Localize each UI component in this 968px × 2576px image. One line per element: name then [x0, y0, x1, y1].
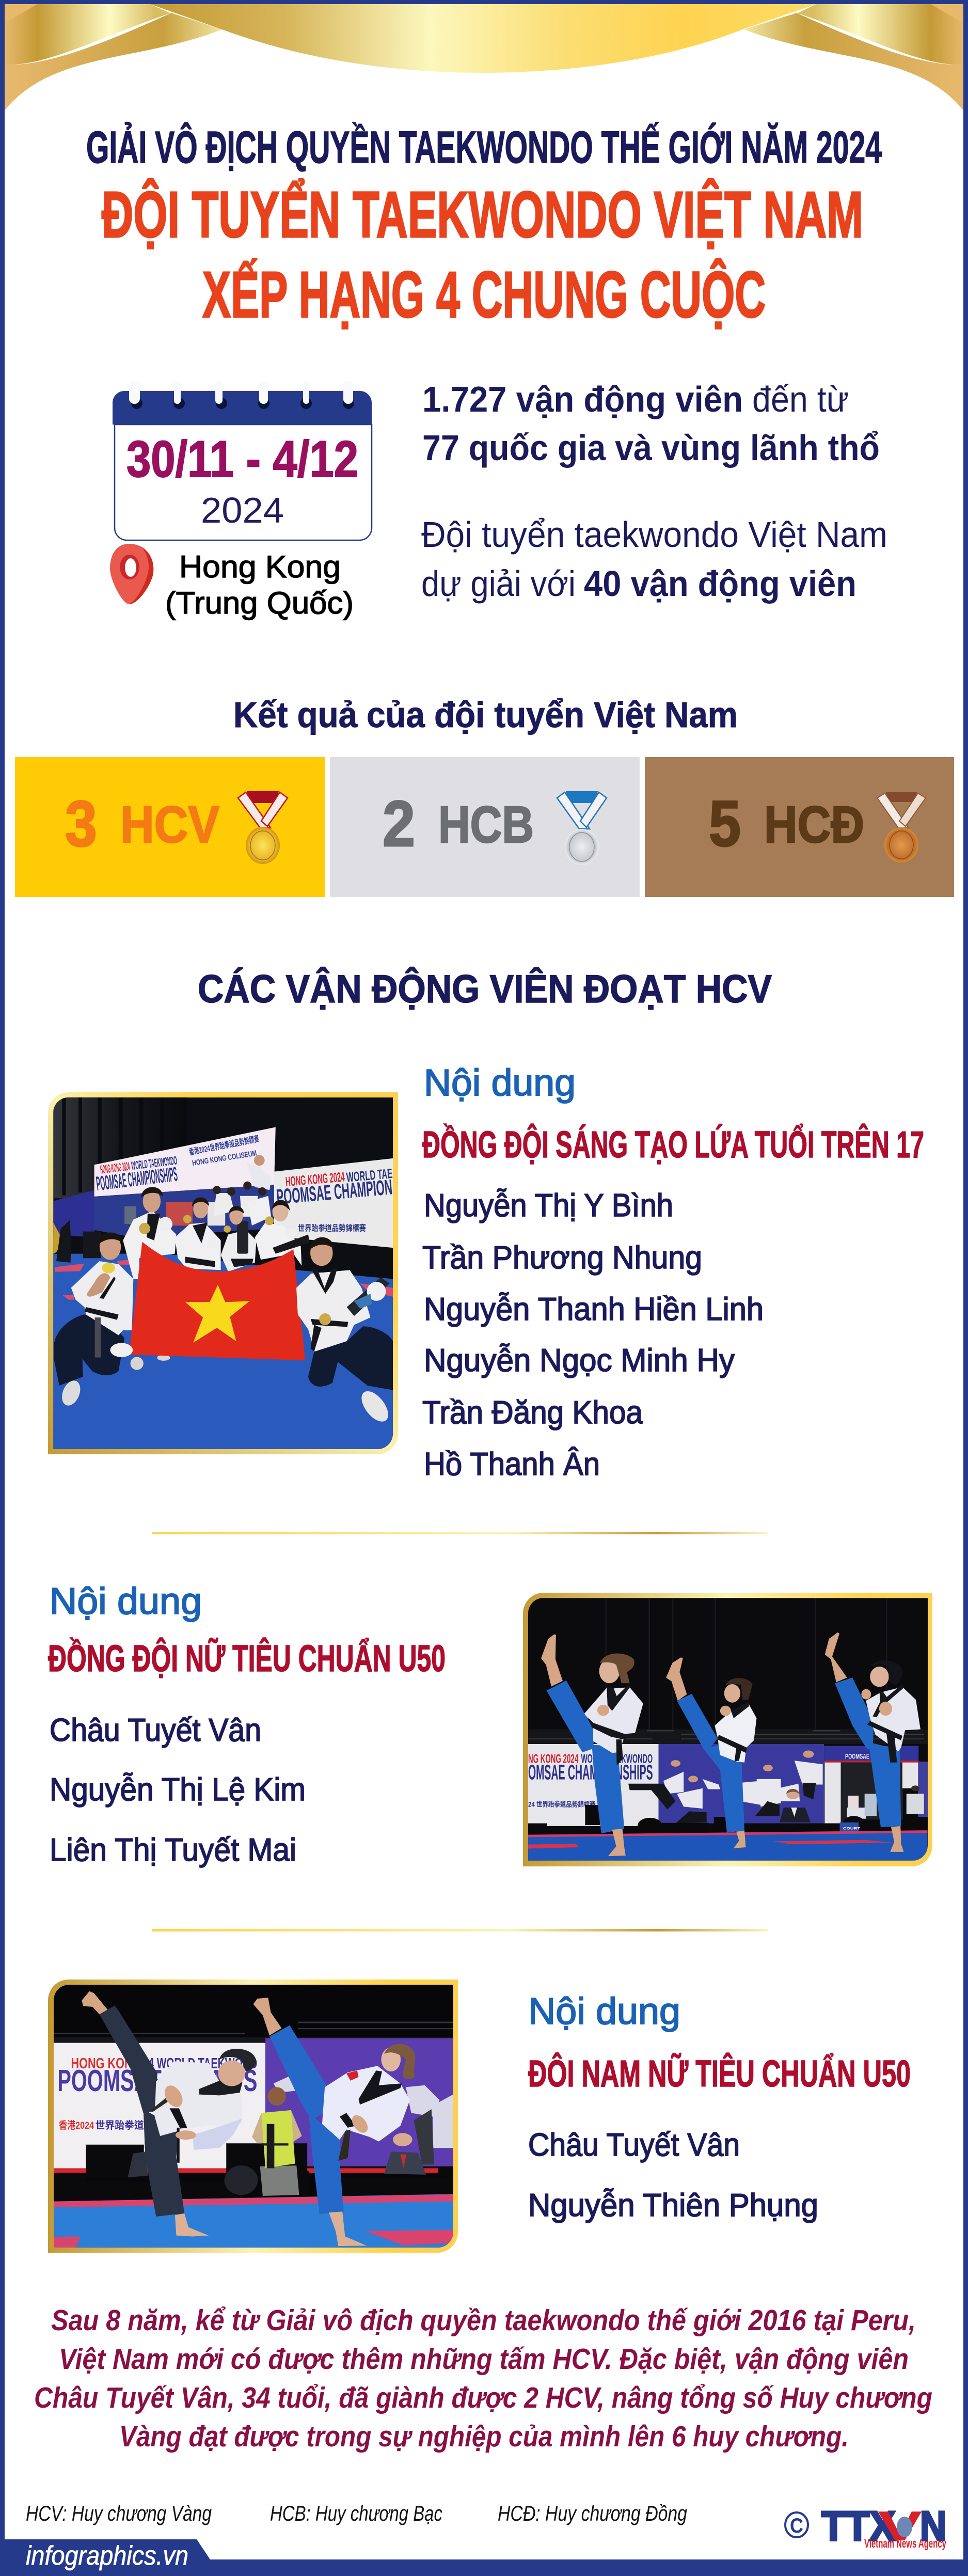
fact: athletes and countries [422, 379, 880, 468]
photo: male and female pair kicking: 香港2024 [59, 2119, 94, 2131]
shoes behind flag [131, 1357, 144, 1370]
legend [26, 2501, 687, 2525]
icon: location pin [110, 544, 153, 604]
fact: vietnam team size: Đội tuyển taekwondo Việt Nam [421, 514, 887, 555]
photo: team with flag: HONG KONG COLISEUM [192, 1149, 257, 1168]
photo: three athletes kicking: POOMSAE [845, 1752, 869, 1761]
calendar date: 30/11 - 4/12 [126, 430, 358, 488]
fact: athletes and countries: 1.727 vận động viên [422, 379, 743, 419]
photo: three athletes kicking: NG KONG 2024 [528, 1752, 578, 1766]
referee [780, 1808, 811, 1823]
section 3: athlete names: Nguyễn Thiên Phụng [528, 2188, 818, 2223]
logo: TTXVN: C [790, 2515, 803, 2537]
panel: gold medals: HCV [120, 796, 219, 854]
fact: vietnam team size: dự giải với [421, 563, 576, 604]
photo: three athletes kicking [523, 1593, 932, 1866]
section 2: category: ĐỒNG ĐỘI NỮ TIÊU CHUẨN U50 [48, 1638, 446, 1679]
panel: gold medals: 3 [65, 788, 97, 860]
photo: team with flag: POOMSAE CHAMPION [275, 1175, 393, 1209]
location text [165, 549, 354, 620]
heading: gold medal athletes: CÁC VẬN ĐỘNG VIÊN ĐOẠT HCV [198, 967, 772, 1011]
athlete left [541, 1635, 643, 1856]
banner athletes [663, 1761, 823, 1809]
athlete right [825, 1632, 921, 1852]
photo: three athletes kicking: COURT [843, 1827, 860, 1830]
photo: team with flag [48, 1092, 398, 1454]
section 1: athlete names: Trần Phương Nhung [422, 1240, 702, 1276]
section 2: athlete names: Nguyễn Thị Lệ Kim [50, 1772, 306, 1808]
photo: team with flag: WORLD TAE [345, 1166, 393, 1185]
logo: TTXVN: TTX [821, 2503, 896, 2550]
panel: gold medals [15, 757, 325, 897]
section 3: event: Nội dung [528, 1991, 680, 2032]
photo: three athletes kicking: OMSAE CHAMPIONSHIPS [528, 1760, 653, 1784]
panel: bronze medals: 5 [709, 788, 741, 860]
icon: bronze medal [877, 792, 926, 862]
website footer: infographics.vn [26, 2541, 188, 2571]
location text: (Trung Quốc) [165, 586, 354, 620]
section 1: event: Nội dung [424, 1062, 576, 1104]
fact: vietnam team size: 40 vận động viên [584, 563, 856, 604]
section 3: athlete names [528, 2127, 818, 2223]
heading: results: Kết quả của đội tuyển Việt Nam [233, 695, 738, 735]
back row athletes [123, 1187, 310, 1279]
closing paragraph: Vàng đạt được trong sự nghiệp của mình lên 6 huy chương. [119, 2420, 849, 2453]
photo: team with flag: HONG KONG 2024 [100, 1159, 131, 1176]
logo: TTXVN: N [920, 2503, 946, 2550]
closing paragraph [34, 2304, 932, 2453]
panel: silver medals: 2 [383, 788, 415, 860]
logo: TTXVN [785, 2503, 946, 2551]
calendar year: 2024 [201, 490, 284, 530]
legend: HCB: Huy chương Bạc [270, 2501, 442, 2525]
fact: athletes and countries: đến từ [752, 379, 849, 419]
female athlete [253, 1998, 415, 2246]
panel: silver medals [330, 757, 640, 897]
legend: HCĐ: Huy chương Đồng [498, 2501, 687, 2525]
section 2: event: Nội dung [50, 1581, 202, 1622]
photo: three athletes kicking: WORLD TAEKWONDO [581, 1752, 653, 1766]
section 1: athlete names [422, 1188, 764, 1482]
seated official [384, 2109, 434, 2175]
photo: male and female pair kicking: 世界跆拳道 [96, 2119, 144, 2131]
section 1: athlete names: Nguyễn Thị Y Bình [424, 1188, 673, 1223]
left kneeling athlete [54, 1233, 133, 1408]
photo: male and female pair kicking [48, 1980, 458, 2253]
location text: Hong Kong [179, 549, 341, 584]
section 1: athlete names: Nguyễn Thanh Hiền Linh [424, 1292, 764, 1327]
section 2: athlete names [50, 1713, 306, 1868]
icon: silver medal [557, 791, 607, 865]
header gold ribbons [5, 4, 963, 111]
tables [528, 1805, 928, 1834]
section 2: athlete names: Châu Tuyết Vân [50, 1713, 261, 1748]
male athlete [82, 1991, 256, 2237]
fact: vietnam team size [421, 514, 887, 604]
icon: gold medal [238, 791, 288, 864]
photographer [252, 2087, 302, 2196]
banner figures [274, 2076, 453, 2148]
floor [528, 1831, 928, 1861]
crowd [124, 1155, 271, 1226]
fact: athletes and countries: 77 quốc gia và vùng lãnh thổ [422, 428, 880, 468]
panel: silver medals: HCB [438, 796, 534, 854]
calendar [113, 381, 372, 540]
photo: male and female pair kicking: POOMSAE CHAMPS [57, 2064, 257, 2098]
panel: bronze medals [645, 757, 954, 897]
mat [54, 2194, 453, 2248]
right kneeling athlete [296, 1237, 393, 1426]
flag [129, 1242, 305, 1360]
photo: team with flag: POOMSAE CHAMPIONSHIPS [95, 1163, 179, 1195]
photo: team with flag: 世界跆拳道品勢錦標賽 [298, 1223, 366, 1233]
photo: three athletes kicking: 24 世界跆拳道品勢錦標賽 [528, 1800, 596, 1809]
athlete middle [666, 1657, 756, 1848]
photo: team with flag: HONG KONG 2024 [285, 1169, 345, 1189]
logo: TTXVN: V [878, 2503, 922, 2550]
section 1: athlete names: Hồ Thanh Ân [424, 1447, 600, 1482]
photo: team with flag: WORLD TAEKWONDO [131, 1154, 178, 1172]
section 1: athlete names: Trần Đăng Khoa [422, 1395, 643, 1431]
legend: HCV: Huy chương Vàng [26, 2501, 212, 2525]
photo: male and female pair kicking: HONG KONG [71, 2055, 141, 2071]
photo: team with flag: 香港2024世界跆拳道品勢錦標賽 [188, 1134, 260, 1157]
section 1: athlete names: Nguyễn Ngọc Minh Hy [424, 1343, 735, 1378]
panel: bronze medals: HCĐ [764, 796, 864, 854]
section 3: athlete names: Châu Tuyết Vân [528, 2127, 740, 2163]
photo: male and female pair kicking: 24 WORLD TAEKWOND [142, 2055, 257, 2071]
section 2: athlete names: Liên Thị Tuyết Mai [50, 1832, 296, 1868]
